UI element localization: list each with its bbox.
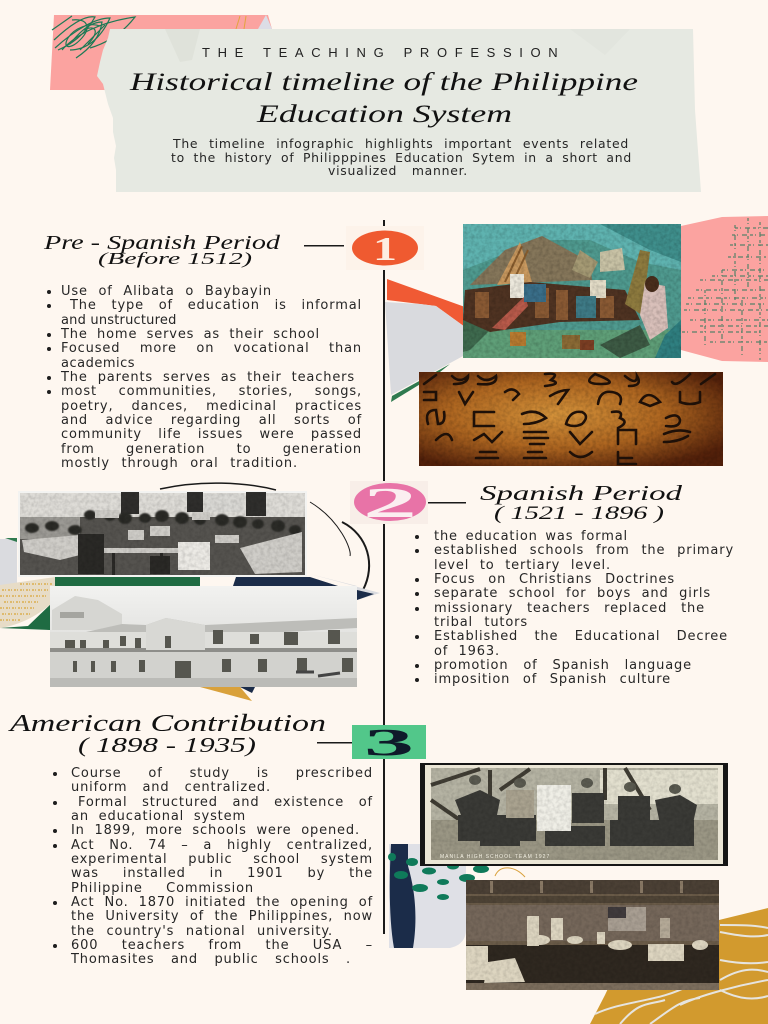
- badge: number 2: 2: [363, 481, 417, 527]
- badge: number 2: [350, 481, 428, 527]
- text block: American Contribution bullets: an educational system: [71, 809, 246, 824]
- text block: Pre-Spanish Period bullets: mostly through oral tradition.: [61, 456, 298, 471]
- heading: Spanish Period: ( 1521 - 1896 ): [494, 503, 664, 524]
- text block: American Contribution bullets: experimental public school system: [71, 852, 373, 867]
- text block: Spanish Period bullets: separate school for boys and girls: [434, 586, 711, 601]
- text block: American Contribution bullets: uniform and centralized.: [71, 780, 271, 795]
- text block: Pre-Spanish Period bullets: [47, 284, 362, 471]
- text block: American Contribution bullets: Act No. 1870 initiated the opening of: [71, 895, 373, 910]
- text block: American Contribution bullets: Act No. 74 – a highly centralized,: [71, 838, 373, 853]
- text block: Spanish Period bullets: imposition of Spanish culture: [434, 672, 671, 687]
- connector: period three: [317, 742, 352, 744]
- photo: Manila High School team: MANILA HIGH SCHOOL TEAM 1927: [440, 854, 550, 860]
- text block: American Contribution bullets: the country's national university.: [71, 924, 333, 939]
- text block: American Contribution bullets: the University of the Philippines, now: [71, 909, 373, 924]
- decoration: gold blob with white swirl lines: [590, 908, 768, 1024]
- text block: Pre-Spanish Period bullets: and advice regarding all sorts of: [61, 413, 362, 428]
- text block: American Contribution bullets: Thomasites and public schools .: [71, 952, 351, 967]
- heading: Pre-Spanish Period: (Before 1512): [98, 249, 253, 268]
- heading: Pre-Spanish Period: Pre - Spanish Period: [43, 232, 281, 254]
- text block: American Contribution bullets: [53, 766, 373, 967]
- badge: number 3: 3: [364, 722, 414, 764]
- heading: Pre-Spanish Period: [43, 232, 281, 268]
- text block: American Contribution bullets: In 1899, more schools were opened.: [71, 823, 360, 838]
- text block: Pre-Spanish Period bullets: The parents serves as their teachers: [61, 370, 355, 385]
- decoration: collage shapes behind photos, period two: [0, 483, 380, 701]
- photo: pre-hispanic mural painting: [463, 224, 681, 358]
- header description: visualized manner.: [328, 163, 468, 178]
- connector: period one: [304, 245, 344, 246]
- header description: [171, 136, 632, 178]
- header description: to the history of Philipppines Education Sytem in a short and: [171, 150, 632, 164]
- text block: Pre-Spanish Period bullets: The type of education is informal: [70, 298, 362, 313]
- text block: Pre-Spanish Period bullets: from generation to generation: [61, 442, 362, 457]
- heading: American Contribution: [7, 711, 326, 757]
- text block: Spanish Period bullets: of 1963.: [434, 644, 500, 659]
- header description: The timeline infographic highlights important events related: [173, 136, 629, 151]
- text block: American Contribution bullets: Philippine Commission: [71, 881, 254, 896]
- text block: American Contribution bullets: Formal structured and existence of: [78, 795, 373, 810]
- text block: Pre-Spanish Period bullets: Focused more on vocational than: [61, 341, 362, 356]
- text block: Spanish Period bullets: missionary teachers replaced the: [434, 601, 705, 616]
- text block: Spanish Period bullets: [415, 529, 734, 687]
- text block: Spanish Period bullets: Established the Educational Decree: [434, 629, 728, 644]
- photo: American era classroom with flag: [466, 880, 719, 990]
- text block: Spanish Period bullets: the education was formal: [434, 529, 628, 544]
- text block: Pre-Spanish Period bullets: most communities, stories, songs,: [61, 384, 362, 399]
- heading: Spanish Period: [480, 481, 683, 524]
- header torn paper panel: [97, 29, 701, 192]
- heading: American Contribution: ( 1898 - 1935): [78, 733, 256, 757]
- text block: Spanish Period bullets: tribal tutors: [434, 615, 528, 630]
- header eyebrow: THE TEACHING PROFESSION: [202, 45, 565, 60]
- text block: Pre-Spanish Period bullets: academics: [61, 356, 135, 371]
- text block: American Contribution bullets: Course of study is prescribed: [71, 766, 373, 781]
- text block: Spanish Period bullets: established schools from the primary: [434, 543, 734, 558]
- photo: Spanish era school building: [50, 586, 357, 687]
- text block: Spanish Period bullets: promotion of Spanish language: [434, 658, 692, 673]
- badge: number 1: [346, 226, 424, 270]
- text block: Pre-Spanish Period bullets: community life issues were passed: [61, 427, 362, 442]
- badge: number 3: [352, 722, 426, 764]
- text block: Spanish Period bullets: Focus on Christians Doctrines: [434, 572, 675, 587]
- decoration: orange and grey shapes beside painting: [385, 279, 465, 402]
- main title: Historical timeline of the Philippine: [129, 69, 638, 96]
- badge: number 1: 1: [373, 231, 397, 268]
- photo: Manila High School team: [420, 763, 728, 866]
- timeline axis: [383, 220, 385, 934]
- heading: American Contribution: American Contribution: [7, 711, 326, 737]
- text block: Pre-Spanish Period bullets: Use of Alibata o Baybayin: [61, 284, 272, 299]
- text block: American Contribution bullets: was installed in 1901 by the: [71, 866, 373, 881]
- photo: Spanish era classroom: [18, 491, 307, 577]
- main title: [129, 69, 638, 128]
- text block: Pre-Spanish Period bullets: and unstructured: [61, 313, 177, 328]
- main title: Education System: [256, 101, 512, 128]
- text block: Pre-Spanish Period bullets: The home serves as their school: [61, 327, 320, 342]
- header decoration: pink torn paper with green scribble: [50, 15, 272, 90]
- text block: Spanish Period bullets: level to tertiary level.: [434, 558, 611, 573]
- text block: American Contribution bullets: 600 teachers from the USA –: [71, 938, 373, 953]
- text block: Pre-Spanish Period bullets: poetry, dances, medicinal practices: [61, 399, 362, 414]
- photo: baybayin script panel: [419, 372, 723, 466]
- decoration: navy and grey dotted shape: [388, 844, 525, 948]
- heading: Spanish Period: Spanish Period: [480, 481, 683, 505]
- decoration: pink speckled shape: [681, 216, 768, 362]
- connector: period two: [427, 502, 466, 504]
